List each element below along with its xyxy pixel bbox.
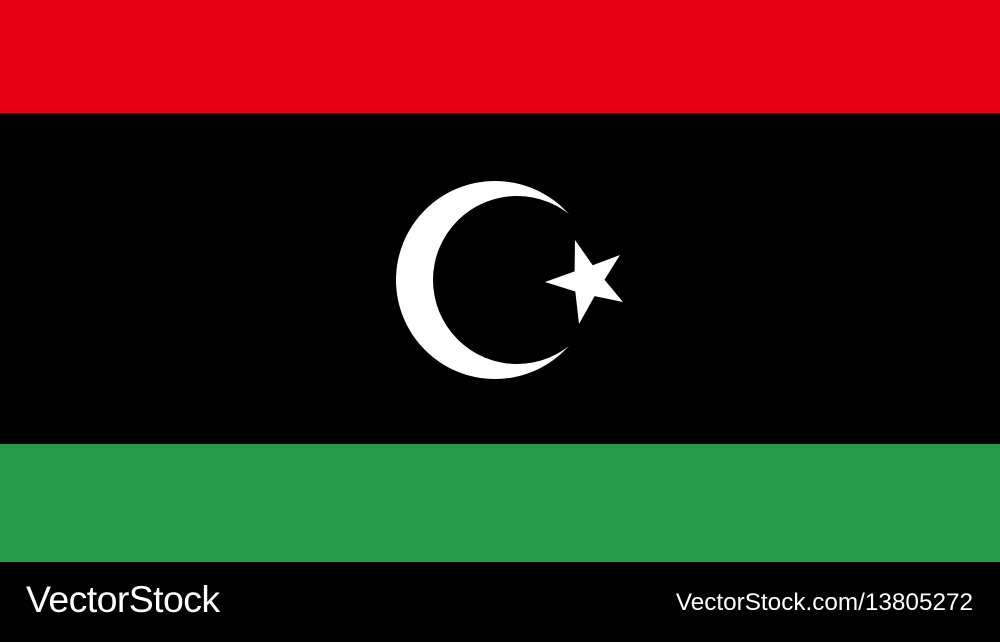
emblem: crescent and star xyxy=(396,181,623,379)
footer bar xyxy=(0,562,1000,642)
footer brand text: VectorStock xyxy=(26,578,220,620)
black stripe xyxy=(0,113,1000,444)
icon: crescent xyxy=(396,181,570,379)
icon: star xyxy=(545,240,623,324)
footer url text: VectorStock.com/13805272 xyxy=(676,589,973,616)
red stripe xyxy=(0,0,1000,113)
green stripe xyxy=(0,444,1000,562)
